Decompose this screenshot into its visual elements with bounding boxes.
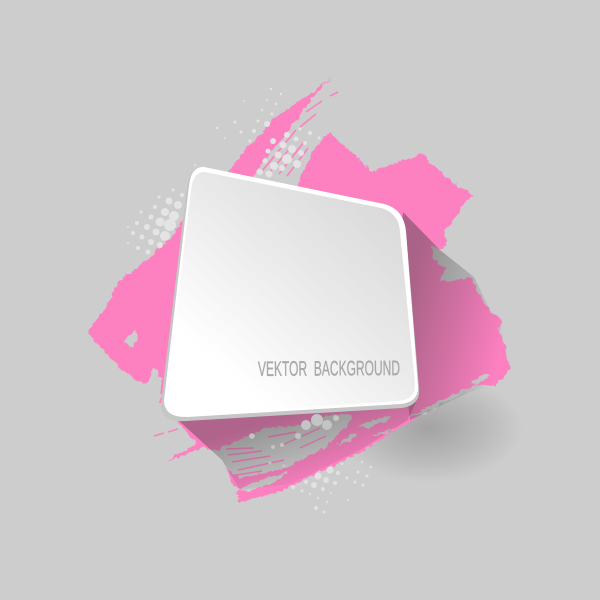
card: under-edge xyxy=(161,167,419,421)
soft ground shadow xyxy=(333,373,523,483)
long shadow below xyxy=(178,402,416,490)
brush: main body xyxy=(88,77,510,502)
card xyxy=(161,167,419,421)
card: face xyxy=(166,172,415,415)
pink brush stroke xyxy=(88,77,510,502)
card: white rim xyxy=(164,167,418,417)
gap: lower streak field xyxy=(212,415,353,478)
grey gaps in brush stroke xyxy=(123,246,490,491)
gap: right shadow notch xyxy=(432,246,474,282)
halftone dots: lower cluster xyxy=(291,461,372,514)
brush: thin streaks and flecks xyxy=(154,92,338,436)
gap: bottom streak xyxy=(238,472,287,491)
halftone dots: left cluster xyxy=(127,188,184,254)
halftone dots on shadow xyxy=(249,414,339,468)
gap: thin streaks xyxy=(337,373,490,445)
gap: left scratch xyxy=(123,331,138,347)
card label: VEKTOR BACKGROUND xyxy=(258,357,400,381)
halftone dots: upper cluster xyxy=(194,88,320,178)
pink streaks inside lower gap xyxy=(226,428,326,476)
gap: left notch xyxy=(148,367,162,402)
long shadow on right xyxy=(396,212,508,420)
